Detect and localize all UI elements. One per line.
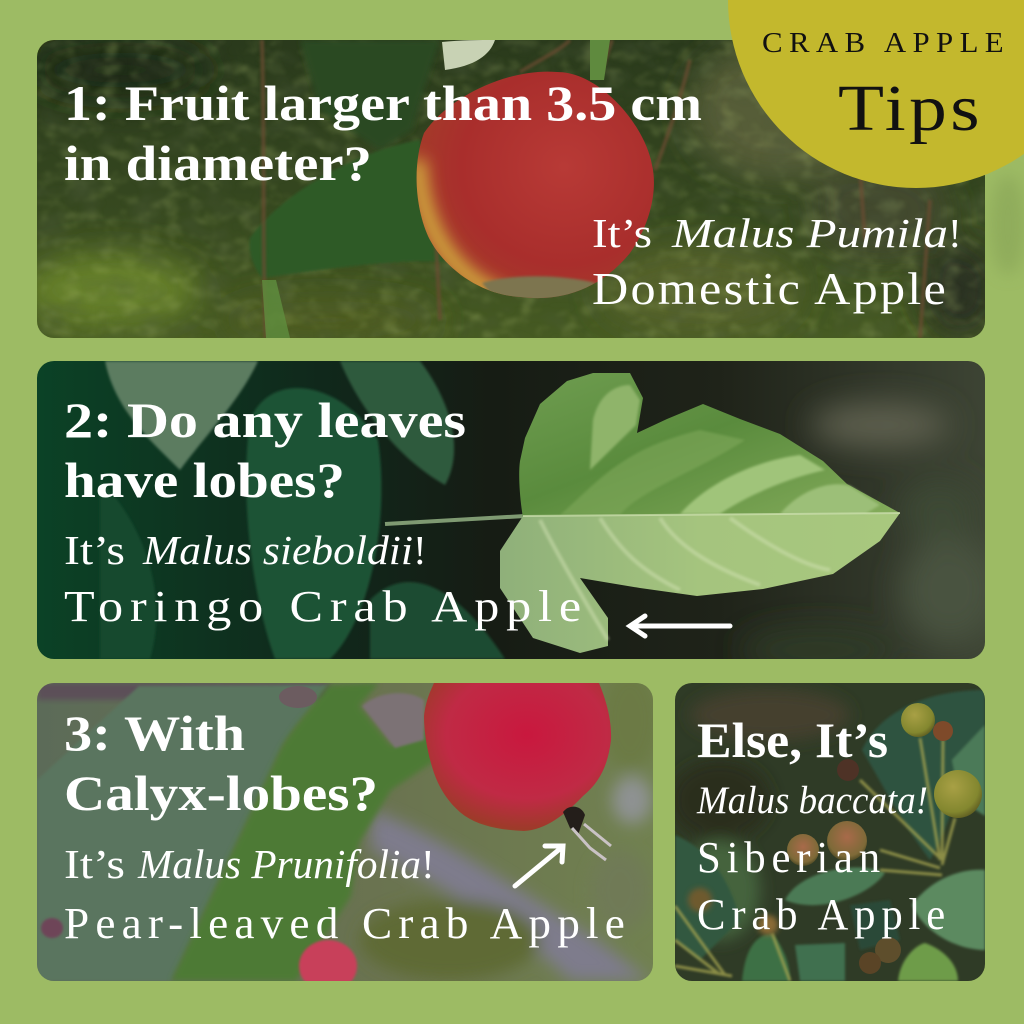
answer: Malus pumila: It’s [592, 210, 652, 256]
answer: Malus prunifolia [64, 841, 631, 948]
answer: Malus prunifolia: Malus Prunifolia [137, 841, 421, 887]
panel: question 2 leaf lobes [37, 361, 1000, 672]
answer: Malus pumila: Domestic Apple [592, 264, 948, 314]
heading: question 1: in diameter? [64, 135, 372, 191]
photo: red apple on mossy background [20, 40, 1000, 344]
answer: Malus sieboldii [64, 527, 588, 631]
answer: Malus pumila [592, 210, 962, 314]
panel: else siberian crab apple [670, 683, 985, 981]
heading: question 2: have lobes? [64, 452, 345, 508]
gray-green leaf [37, 685, 328, 981]
answer: Malus sieboldii: It’s [64, 527, 125, 573]
heading: else: Else, It’s [697, 712, 888, 768]
answer: Malus baccata [696, 779, 951, 939]
answer: Malus baccata: Crab Apple [697, 890, 951, 939]
heading: question 1 [64, 75, 702, 191]
answer: Malus baccata: Malus baccata! [696, 779, 928, 822]
answer: Malus pumila: Malus Pumila [671, 210, 948, 256]
panel: question 1 fruit size [20, 40, 1000, 344]
photo: lobed leaf on dark background [37, 361, 1000, 672]
corner badge: title [728, 0, 1024, 188]
title: tips: Tips [838, 72, 983, 145]
heading: question 3 [64, 705, 378, 821]
photo: small fruits and leaves [670, 683, 985, 981]
heading: question 1: 1: Fruit larger than 3.5 cm [64, 75, 702, 131]
arrow: points to calyx [515, 846, 563, 886]
answer: Malus sieboldii: ! [413, 527, 427, 573]
title: crab apple: CRAB APPLE [762, 27, 1010, 59]
answer: Malus prunifolia: ! [421, 841, 435, 887]
answer: Malus pumila: ! [948, 210, 962, 256]
answer: Malus sieboldii: Malus sieboldii [142, 527, 413, 573]
heading: question 3: 3: With [64, 705, 245, 761]
answer: Malus prunifolia: Pear-leaved Crab Apple [64, 899, 631, 948]
heading: question 2: 2: Do any leaves [64, 392, 466, 448]
bright green leaf [171, 683, 450, 981]
answer: Malus prunifolia: It’s [64, 841, 125, 887]
answer: Malus sieboldii: Toringo Crab Apple [64, 582, 588, 631]
panel: question 3 calyx lobes [37, 670, 660, 992]
photo: red fruit with calyx [37, 670, 660, 992]
icon: lobed leaf [500, 373, 900, 653]
arrow: points to leaf lobe [630, 616, 730, 636]
answer: Malus baccata: Siberian [697, 833, 886, 882]
heading: question 2 [64, 392, 466, 508]
heading: question 3: Calyx-lobes? [64, 765, 378, 821]
